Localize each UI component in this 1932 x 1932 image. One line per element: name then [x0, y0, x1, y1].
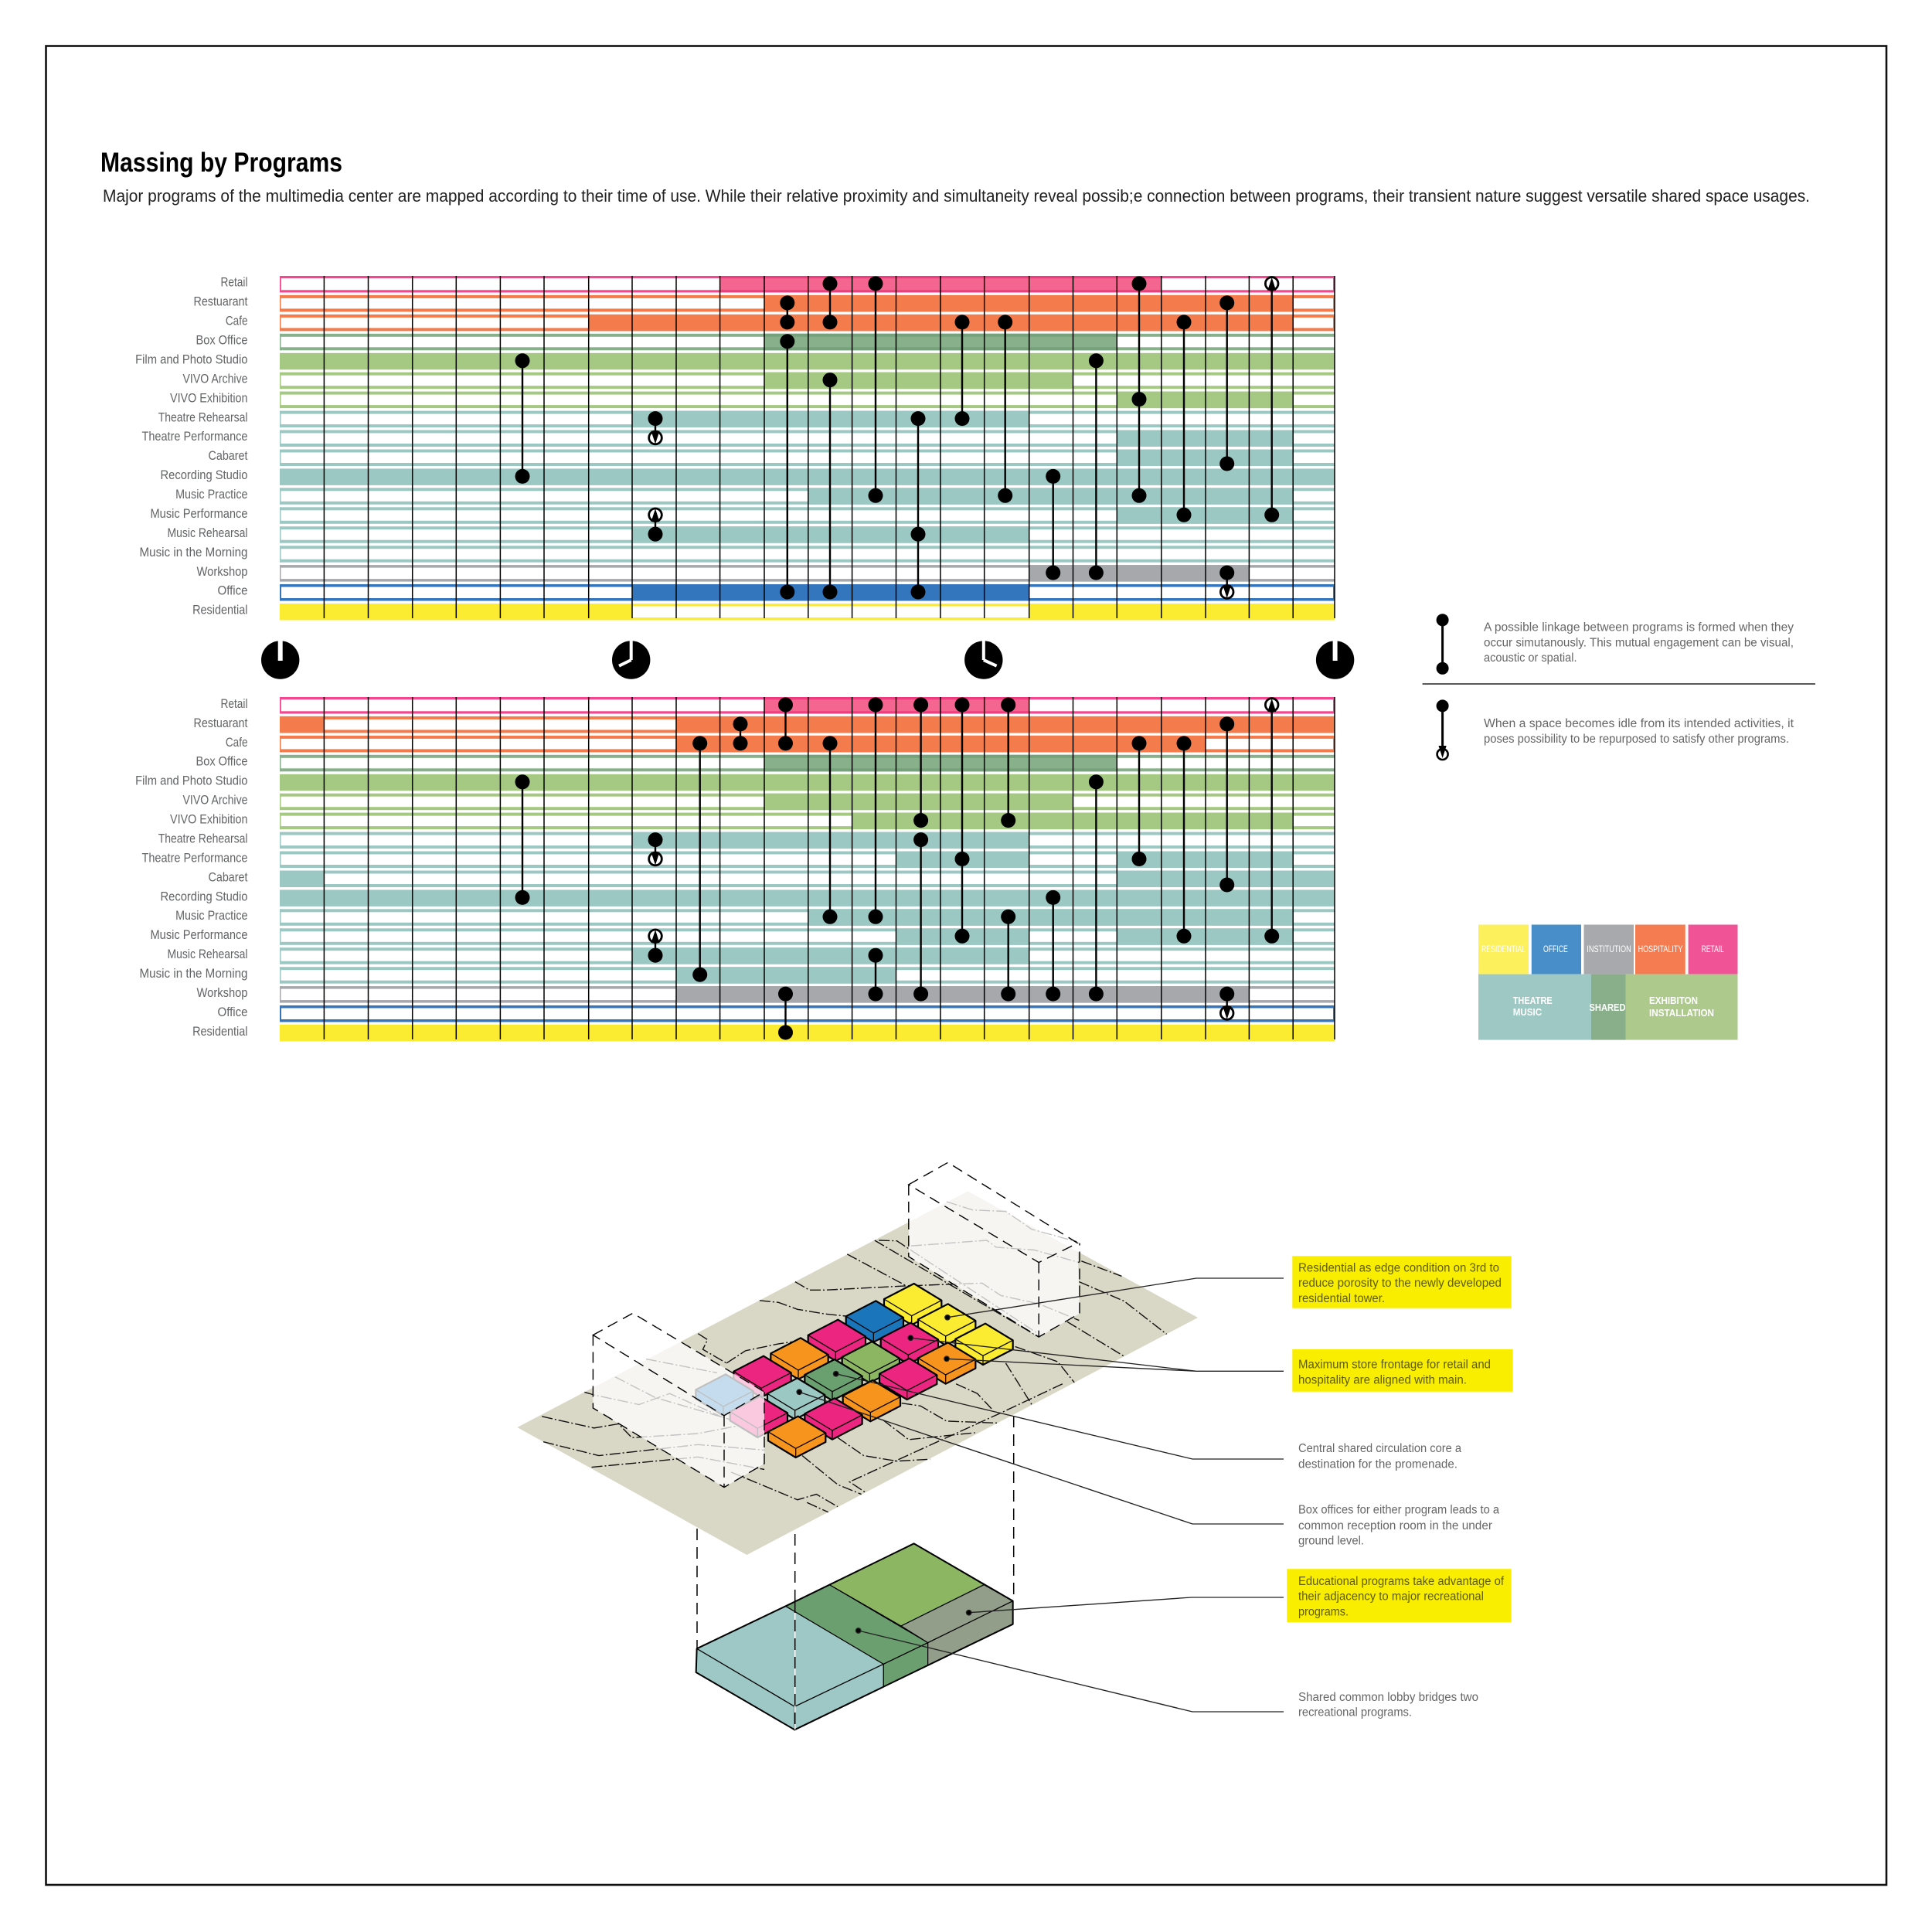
idle link: music performance — [648, 930, 663, 963]
tile: theatre and music: MUSIC — [1513, 1007, 1542, 1018]
site plate — [517, 1191, 1198, 1555]
tile: exhibition and installation: EXHIBITON — [1649, 995, 1698, 1006]
link: cafe and music in the morning — [692, 736, 707, 982]
link: theatre rehearsal, music rehearsal, office — [910, 411, 926, 600]
link: film and workshop — [1089, 353, 1104, 580]
tile: office — [1532, 924, 1581, 975]
block: yellow residential 2 — [918, 1304, 975, 1345]
block: teal box office — [767, 1378, 825, 1420]
tile: institution: INSTITUTION — [1587, 945, 1631, 954]
zone: green exhibition — [829, 1543, 984, 1626]
linkages: bottom chart — [515, 697, 1279, 1040]
row labels: bottom chart: Music Rehearsal — [167, 947, 247, 961]
legend: linkage notes — [1423, 614, 1815, 760]
link: cafe and music performance — [1176, 736, 1192, 944]
row labels: bottom chart: Music Practice — [175, 908, 247, 923]
tile: shared — [1589, 975, 1626, 1040]
row labels: top chart: Cafe — [226, 314, 247, 328]
link: box office and office — [780, 334, 794, 600]
block: pink retail 3 — [733, 1356, 791, 1397]
link: retail and cafe — [822, 277, 838, 329]
icon: repurposed idle space — [1437, 699, 1449, 760]
block: orange hospitality 2 — [918, 1342, 975, 1384]
row labels: bottom chart: Residential — [192, 1024, 247, 1039]
block: pink retail 4 — [879, 1359, 937, 1400]
idle link: theatre performance — [648, 832, 663, 866]
note: shared lobby: Shared common lobby bridges two — [1298, 1691, 1478, 1704]
icon: clock midnight end — [1316, 641, 1354, 679]
callout: residential edge: Residential as edge condition on 3rd to — [1298, 1261, 1499, 1275]
callout: educational programs: their adjacency to major recreational — [1298, 1590, 1484, 1604]
block: orange hospitality 1 — [770, 1338, 828, 1379]
row labels: top chart: Office — [218, 583, 247, 598]
row labels: top chart: Theatre Rehearsal — [158, 410, 247, 424]
row labels: bottom chart: Office — [218, 1005, 247, 1019]
row labels: top chart: Music Performance — [150, 506, 247, 521]
leader: shared lobby note — [856, 1628, 1284, 1712]
link: restaurant and cafe — [780, 295, 794, 329]
block: blue office — [846, 1301, 903, 1342]
icon: linkage — [1437, 614, 1449, 675]
translucent tower volume: right — [909, 1162, 1080, 1337]
link: retail and exhibition — [913, 697, 928, 828]
callout: store frontage: hospitality are aligned with main. — [1298, 1373, 1467, 1386]
idle link: office — [1219, 566, 1234, 598]
link: retail and music practice — [869, 697, 883, 924]
row labels: bottom chart: VIVO Exhibition — [170, 811, 247, 826]
note: repurposed idle space: When a space becomes idle from its intended activities, it — [1484, 717, 1794, 730]
row labels: bottom chart: Retail — [221, 696, 247, 711]
note: box offices: common reception room in the under — [1298, 1519, 1492, 1532]
link: workshop and residential — [778, 987, 793, 1040]
block: green education — [842, 1342, 900, 1383]
row labels: top chart: Music in the Morning — [139, 545, 247, 560]
block: pink retail 2 — [881, 1323, 938, 1364]
link: restaurant and cabaret — [1219, 716, 1234, 892]
dash over teal volume — [794, 1601, 796, 1730]
row labels: bottom chart: Recording Studio — [161, 889, 247, 903]
row labels: bottom chart: Cabaret — [209, 869, 248, 884]
note: repurposed idle space — [1484, 717, 1794, 746]
note: shared lobby — [1298, 1691, 1478, 1719]
leader: educational note — [966, 1597, 1284, 1615]
bars: bottom chart — [280, 697, 1335, 1042]
row labels: bottom chart: Film and Photo Studio — [135, 774, 247, 788]
block: pink retail 1 — [808, 1320, 866, 1361]
row labels: bottom chart: Cafe — [226, 735, 247, 750]
leader: residential note — [945, 1278, 1284, 1320]
row labels: top chart: Cabaret — [209, 448, 248, 463]
note: circulation core — [1298, 1442, 1461, 1471]
block: pink under volume — [730, 1396, 787, 1437]
chart: top schedule — [135, 275, 1335, 620]
title: Massing by Programs — [100, 148, 342, 178]
chart: bottom schedule — [135, 696, 1335, 1042]
link: cafe and music practice — [822, 736, 838, 924]
translucent tower volume: left — [593, 1313, 764, 1488]
tile: residential — [1478, 924, 1529, 975]
row labels: top chart — [135, 275, 248, 617]
link: cafe and theatre rehearsal — [955, 315, 969, 426]
note: linkage: acoustic or spatial. — [1484, 651, 1577, 665]
tile: retail — [1689, 924, 1737, 975]
row labels: top chart: Music Practice — [175, 487, 247, 502]
note: shared lobby: recreational programs. — [1298, 1706, 1412, 1719]
link: film and workshop — [1089, 774, 1104, 1002]
tile: shared: SHARED — [1589, 1002, 1626, 1013]
row labels: top chart: Restuarant — [193, 294, 248, 309]
block: yellow residential 3 — [955, 1324, 1013, 1365]
link: retail, exhibition, music practice — [1131, 277, 1147, 503]
row labels: bottom chart: Theatre Performance — [142, 850, 247, 865]
link: retail and cafe — [778, 697, 793, 750]
block: pink retail 5 — [804, 1398, 862, 1440]
link: retail, theatre performance, music performance — [955, 697, 969, 944]
hour grid: bottom chart — [324, 697, 1335, 1039]
callout: store frontage — [1292, 1349, 1513, 1392]
link: theatre rehearsal and workshop — [913, 832, 928, 1002]
block: orange hospitality 4 — [768, 1417, 825, 1458]
callout: educational programs — [1287, 1569, 1512, 1622]
link: cafe and theatre performance — [1131, 736, 1147, 866]
tile: residential: RESIDENTIAL — [1481, 945, 1526, 954]
base massing block — [696, 1543, 1013, 1730]
tile: exhibition and installation: INSTALLATION — [1649, 1008, 1714, 1019]
leader: store frontage note — [908, 1335, 1284, 1371]
tile: institution — [1584, 924, 1634, 975]
callout: residential edge: residential tower. — [1298, 1292, 1385, 1305]
note: linkage: A possible linkage between programs is formed when they — [1484, 621, 1794, 634]
idle link: office — [1219, 987, 1234, 1019]
linkages: top chart — [515, 277, 1279, 600]
block: yellow residential 1 — [884, 1284, 941, 1325]
note: circulation core: Central shared circulation core a — [1298, 1442, 1461, 1455]
note: box offices: ground level. — [1298, 1534, 1364, 1547]
link: retail and exhibition second — [1001, 697, 1015, 828]
tile: theatre and music — [1478, 975, 1591, 1040]
hour grid: top chart — [324, 276, 1335, 618]
callout: residential edge — [1292, 1256, 1512, 1308]
row labels: top chart: VIVO Exhibition — [170, 390, 247, 405]
tile: office: OFFICE — [1543, 945, 1568, 954]
row labels: bottom chart — [135, 696, 248, 1039]
zone: dark green shared lobby — [786, 1585, 928, 1687]
tile: exhibition and installation — [1626, 975, 1737, 1040]
link: music practice and workshop — [1001, 910, 1015, 1002]
callout: educational programs: programs. — [1298, 1605, 1349, 1618]
link: cafe and music performance — [1176, 315, 1192, 522]
note: box offices: Box offices for either program leads to a — [1298, 1503, 1499, 1516]
row labels: top chart: VIVO Archive — [182, 371, 247, 386]
link: music rehearsal and workshop — [869, 948, 883, 1002]
tile: hospitality: HOSPITALITY — [1638, 945, 1683, 954]
row labels: bottom chart: Workshop — [196, 985, 247, 1000]
note: circulation core: destination for the promenade. — [1298, 1458, 1458, 1471]
link: recording and workshop — [1046, 469, 1060, 580]
row labels: top chart: Music Rehearsal — [167, 526, 247, 540]
row labels: bottom chart: Restuarant — [193, 716, 248, 730]
link: restaurant and cabaret — [1219, 295, 1234, 471]
link: recording and workshop — [1046, 890, 1060, 1002]
link: archive and office — [822, 372, 838, 600]
row labels: top chart: Workshop — [196, 564, 247, 579]
zone: teal theatre and music — [696, 1606, 883, 1730]
callout: educational programs: Educational programs take advantage of — [1298, 1575, 1505, 1588]
row labels: bottom chart: Music Performance — [150, 927, 247, 942]
block: blue under volume — [696, 1374, 753, 1416]
idle link: music performance — [648, 509, 663, 542]
note: repurposed idle space: poses possibility to be repurposed to satisfy other programs. — [1484, 733, 1789, 746]
icon: clock 4 o'clock — [964, 641, 1003, 679]
block: orange hospitality 3 — [843, 1380, 900, 1421]
leader: circulation core note — [833, 1371, 1284, 1459]
link: restaurant and cafe — [733, 716, 748, 750]
callout: residential edge: reduce porosity to the newly developed — [1298, 1277, 1502, 1290]
projection dashes to base massing — [697, 1416, 1014, 1648]
idle link: retail — [1264, 699, 1279, 944]
leader lines — [797, 1278, 1284, 1712]
zone: grey education — [901, 1585, 1013, 1665]
site contour lines — [542, 1202, 1167, 1512]
link: film and recording — [515, 774, 530, 905]
retail and program blocks — [696, 1284, 1013, 1458]
idle link: theatre performance — [648, 411, 663, 444]
row labels: bottom chart: Music in the Morning — [139, 966, 247, 981]
row labels: top chart: Film and Photo Studio — [135, 352, 247, 367]
legend: program colour key — [1478, 924, 1737, 1040]
link: cafe and music practice — [998, 315, 1012, 503]
block: dark green shared core — [804, 1359, 862, 1400]
link: film and recording — [515, 353, 530, 484]
note: linkage: occur simutanously. This mutual engagement can be visual, — [1484, 637, 1794, 649]
axonometric site diagram — [517, 1162, 1198, 1555]
block silhouette — [696, 1543, 1013, 1730]
row labels: top chart: Recording Studio — [161, 468, 247, 482]
row labels: top chart: Theatre Performance — [142, 429, 247, 444]
tile: theatre and music: THEATRE — [1513, 995, 1553, 1006]
row labels: bottom chart: Theatre Rehearsal — [158, 831, 247, 845]
row labels: top chart: Box Office — [196, 333, 247, 348]
clock row — [261, 641, 1354, 679]
note: linkage — [1484, 621, 1794, 665]
row labels: top chart: Retail — [221, 275, 247, 290]
note: box offices — [1298, 1503, 1499, 1547]
row labels: bottom chart: Box Office — [196, 754, 247, 769]
row labels: bottom chart: VIVO Archive — [182, 793, 247, 808]
callout: store frontage: Maximum store frontage for retail and — [1298, 1359, 1491, 1371]
icon: clock midnight — [261, 641, 299, 679]
tile: hospitality — [1635, 924, 1685, 975]
row labels: top chart: Residential — [192, 603, 247, 617]
icon: clock 8 o'clock — [612, 641, 650, 679]
idle link: retail — [1264, 277, 1279, 522]
link: retail and music practice — [869, 277, 883, 503]
leader: box offices note — [797, 1389, 1284, 1524]
bars: top chart — [280, 276, 1335, 620]
subtitle: Major programs of the multimedia center are mapped according to their time of use. While their relative proximity and simultaneity reveal possib;e connection between programs, their transient nature suggest versatile shared space usages. — [103, 186, 1810, 206]
tile: retail: RETAIL — [1702, 945, 1724, 954]
